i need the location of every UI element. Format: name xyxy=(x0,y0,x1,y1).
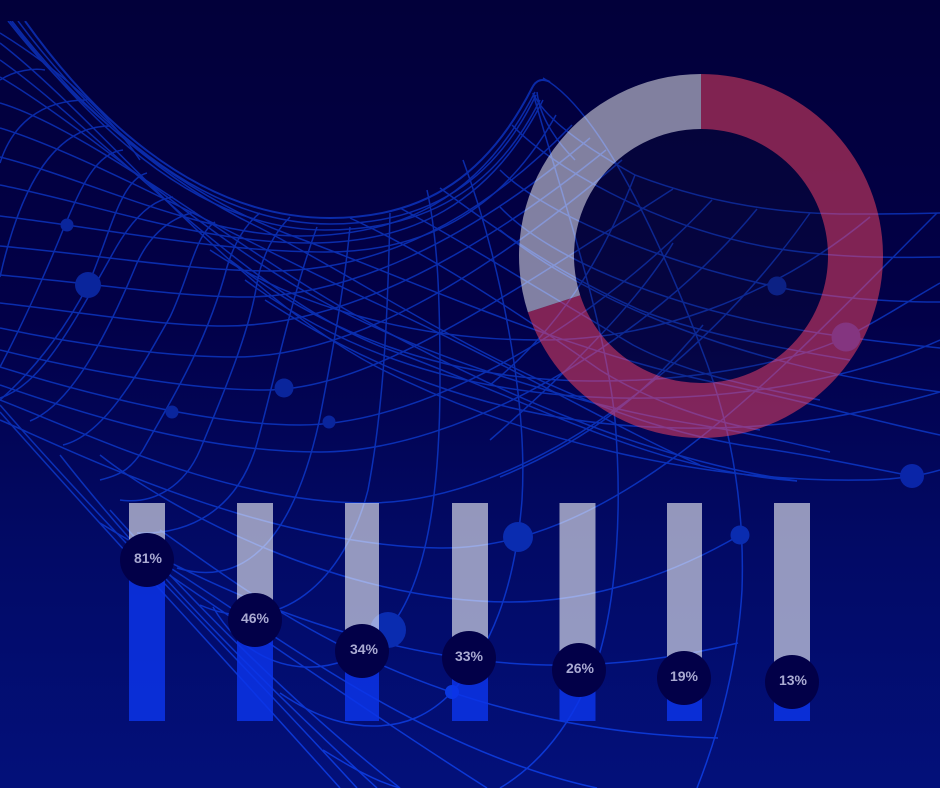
bar 19%: 19% xyxy=(670,668,699,684)
bar 34%: 34% xyxy=(350,641,379,657)
bar 81%: 81% xyxy=(134,550,163,566)
bar 33%: 33% xyxy=(455,648,484,664)
bar 34% xyxy=(335,503,389,721)
bar 46%: 46% xyxy=(241,610,270,626)
bar 26%: 26% xyxy=(566,660,595,676)
network nodes xyxy=(60,218,924,699)
bar 26% xyxy=(552,503,606,721)
bar 33% xyxy=(442,503,496,721)
donut chart xyxy=(519,74,883,438)
bar 13%: 13% xyxy=(779,672,808,688)
bar chart xyxy=(120,503,819,721)
donut segment: red 70% xyxy=(528,74,883,438)
donut segment: grey 30% xyxy=(519,74,701,312)
bar 81% xyxy=(120,503,174,721)
bar 19% xyxy=(657,503,711,721)
bar 46% xyxy=(228,503,282,721)
bar 13% xyxy=(765,503,819,721)
